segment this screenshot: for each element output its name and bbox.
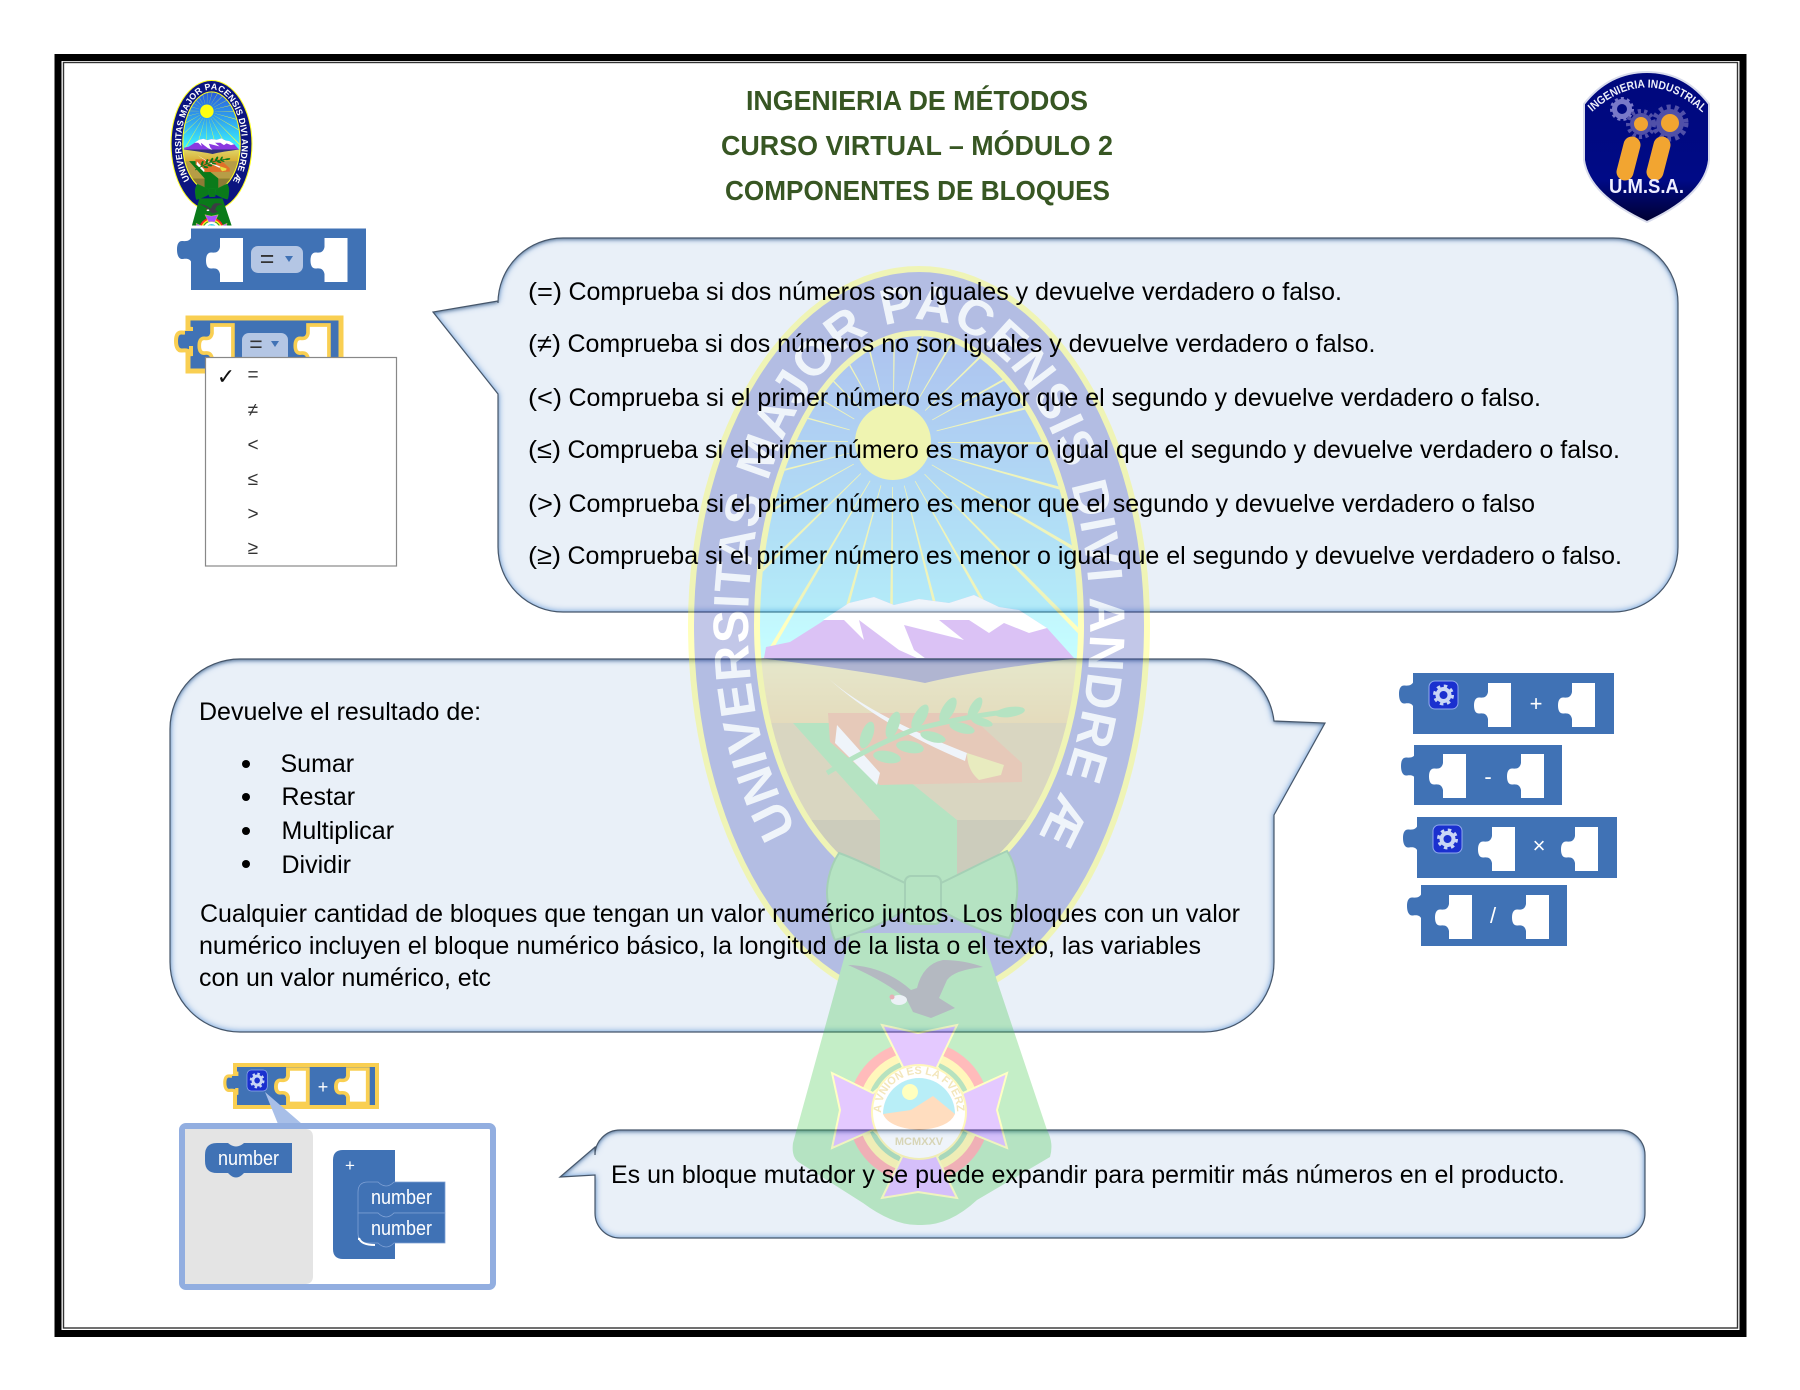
mutator stack: [333, 1150, 445, 1259]
text: comparison operators: (=): [528, 278, 562, 306]
text: comparison operators: (≥): [528, 542, 561, 570]
watermark: university crest: UNIVERSITAS MAJOR PACENSIS DIVI ANDRE Æ: [713, 286, 1124, 849]
dropdown menu: <: [247, 435, 259, 456]
text: comparison operators: (>): [528, 490, 562, 518]
text: arithmetic description: con un valor numérico, etc: [199, 964, 491, 992]
mutator stack: number: [371, 1218, 432, 1240]
dropdown menu: >: [247, 504, 259, 525]
text: mutator description: Es un bloque mutador y se puede expandir para permitir más números en el producto.: [611, 1161, 1565, 1189]
block: equals comparison: =: [260, 245, 274, 273]
logo: UMSA university crest: UNIVERSITAS MAJOR PACENSIS DIVI ANDRE Æ: [174, 84, 248, 184]
dropdown menu: ≥: [248, 538, 258, 559]
text: arithmetic description: Restar: [282, 783, 355, 811]
text: comparison operators: Comprueba si dos números no son iguales y devuelve verdadero o falso.: [568, 330, 1376, 358]
title: CURSO VIRTUAL – MÓDULO 2: [721, 130, 1113, 161]
block: divide: [1407, 885, 1567, 946]
block: divide: /: [1490, 903, 1497, 928]
text: comparison operators: Comprueba si el primer número es menor o igual que el segundo y devuelve verdadero o falso.: [568, 542, 1622, 570]
dropdown menu: =: [247, 365, 259, 386]
watermark: university crest: [688, 266, 1150, 1225]
panel: comparison operators speech bubble: [433, 238, 1678, 612]
title: [721, 85, 1113, 206]
dropdown menu: ✓: [217, 365, 235, 390]
mutator stack: number: [371, 1187, 432, 1209]
dropdown menu: ≤: [248, 469, 258, 490]
dropdown menu: [206, 358, 396, 566]
flyout number block: number: [218, 1148, 279, 1170]
block: selected comparison with yellow outline: [176, 318, 341, 371]
text: comparison operators: (<): [528, 384, 562, 412]
panel: mutator speech bubble: [560, 1130, 1645, 1238]
block: selected comparison with yellow outline: =: [249, 331, 263, 357]
logo: Ingeniería Industrial shield: [1583, 71, 1710, 223]
logo: Ingeniería Industrial shield: INGENIERIA INDUSTRIAL: [1587, 80, 1705, 112]
block: subtract: [1401, 745, 1562, 805]
text: comparison operators: Comprueba si el primer número es mayor o igual que el segundo y devuelve verdadero o falso.: [568, 436, 1620, 464]
text: arithmetic description: Devuelve el resultado de:: [199, 698, 481, 726]
panel: mutator popup: [182, 1092, 493, 1287]
title: COMPONENTES DE BLOQUES: [725, 175, 1110, 206]
logo: Ingeniería Industrial shield: U.M.S.A.: [1609, 176, 1684, 198]
watermark: university crest: LA VNION ES LA FVERZA: [874, 1066, 965, 1112]
mutator stack: +: [345, 1156, 355, 1175]
text: arithmetic description: Multiplicar: [282, 817, 394, 845]
text: comparison operators: Comprueba si el primer número es mayor que el segundo y devuelve verdadero o falso.: [568, 384, 1541, 412]
text: arithmetic description: Cualquier cantidad de bloques que tengan un valor numérico juntos. Los bloques con un valor: [200, 900, 1240, 928]
block: add: [1399, 673, 1614, 734]
block: add: +: [1530, 691, 1542, 716]
logo: UMSA university crest: [170, 80, 252, 226]
panel: arithmetic speech bubble: [170, 659, 1325, 1032]
block: equals comparison: [177, 228, 366, 290]
block: selected add with mutator gear: [225, 1065, 377, 1107]
text: comparison operators: (≤): [528, 436, 561, 464]
block: multiply: ×: [1533, 833, 1545, 858]
block: multiply: [1403, 817, 1617, 878]
text: comparison operators: (≠): [528, 330, 561, 358]
block: subtract: -: [1484, 764, 1492, 789]
text: arithmetic description: numérico incluyen el bloque numérico básico, la longitud de la lista o el texto, las variables: [199, 932, 1201, 960]
text: arithmetic description: Dividir: [282, 851, 351, 879]
block: selected add with mutator gear: +: [318, 1077, 328, 1097]
flyout number block: [205, 1143, 292, 1178]
text: arithmetic description: Sumar: [280, 750, 354, 778]
title: INGENIERIA DE MÉTODOS: [746, 85, 1088, 116]
text: comparison operators: Comprueba si el primer número es menor que el segundo y devuelve verdadero o falso: [568, 490, 1535, 518]
watermark: university crest: MCMXXV: [895, 1136, 944, 1148]
text: comparison operators: Comprueba si dos números son iguales y devuelve verdadero o falso.: [568, 278, 1342, 306]
text: arithmetic description: [199, 698, 1240, 992]
text: comparison operators: [528, 278, 1622, 570]
dropdown menu: ≠: [248, 400, 258, 421]
